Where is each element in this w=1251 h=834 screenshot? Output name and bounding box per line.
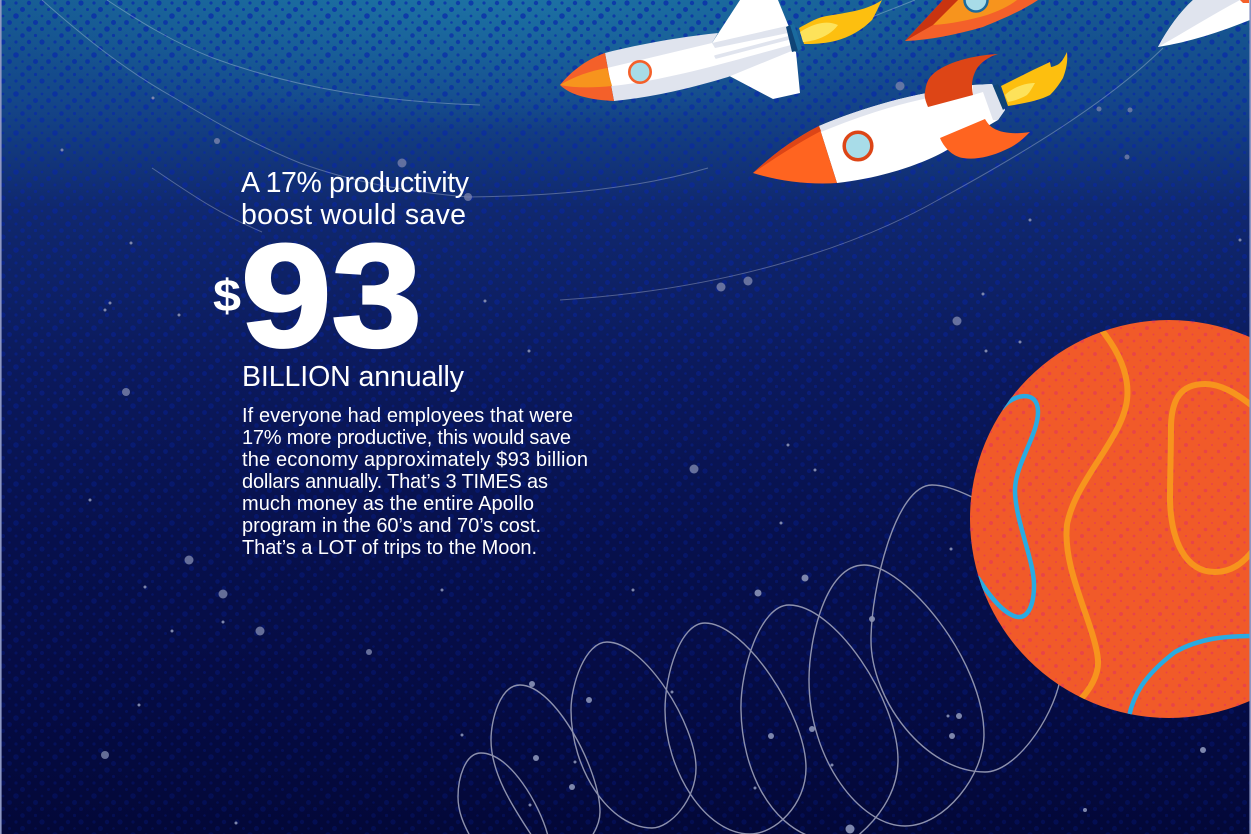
body paragraph: program in the 60’s and 70’s cost. [242, 515, 541, 537]
body paragraph: much money as the entire Apollo [242, 493, 534, 515]
orbit spiral [458, 485, 1060, 834]
big number: $93: 93 [241, 214, 422, 377]
heading: productivity boost [241, 167, 470, 231]
faint orbit arcs at the top [42, 0, 1163, 300]
heading: productivity boost: A 17% productivity [241, 167, 470, 199]
body [605, 26, 794, 101]
flame [799, 0, 882, 44]
window [844, 132, 872, 160]
top and bottom fins [712, 0, 800, 99]
heading: productivity boost: boost would save [241, 199, 466, 231]
lower fin [940, 119, 1030, 159]
rocket: top centre, orange, cropped [905, 0, 1038, 41]
rocket: upper left, white [560, 0, 882, 101]
planet [970, 320, 1251, 722]
nose cone [560, 53, 614, 101]
engine [993, 84, 1008, 110]
engine [786, 24, 800, 52]
body paragraph: the economy approximately $93 billion [242, 449, 588, 471]
rocket: top right, white, cropped [1158, 0, 1250, 47]
body paragraph: 17% more productive, this would save [242, 427, 571, 449]
upper fin [925, 54, 998, 107]
subheading: billion annually: BILLION annually [242, 361, 465, 393]
big number: $93: $ [213, 270, 241, 321]
body paragraph [242, 405, 588, 559]
body [819, 84, 1005, 183]
rocket: large centre, white with orange fins [753, 52, 1067, 184]
body paragraph: If everyone had employees that were [242, 405, 573, 427]
nose cone [753, 126, 837, 184]
flame [1001, 52, 1067, 106]
window [629, 61, 651, 83]
body paragraph: That’s a LOT of trips to the Moon. [242, 537, 537, 559]
body paragraph: dollars annually. That’s 3 TIMES as [242, 471, 548, 493]
